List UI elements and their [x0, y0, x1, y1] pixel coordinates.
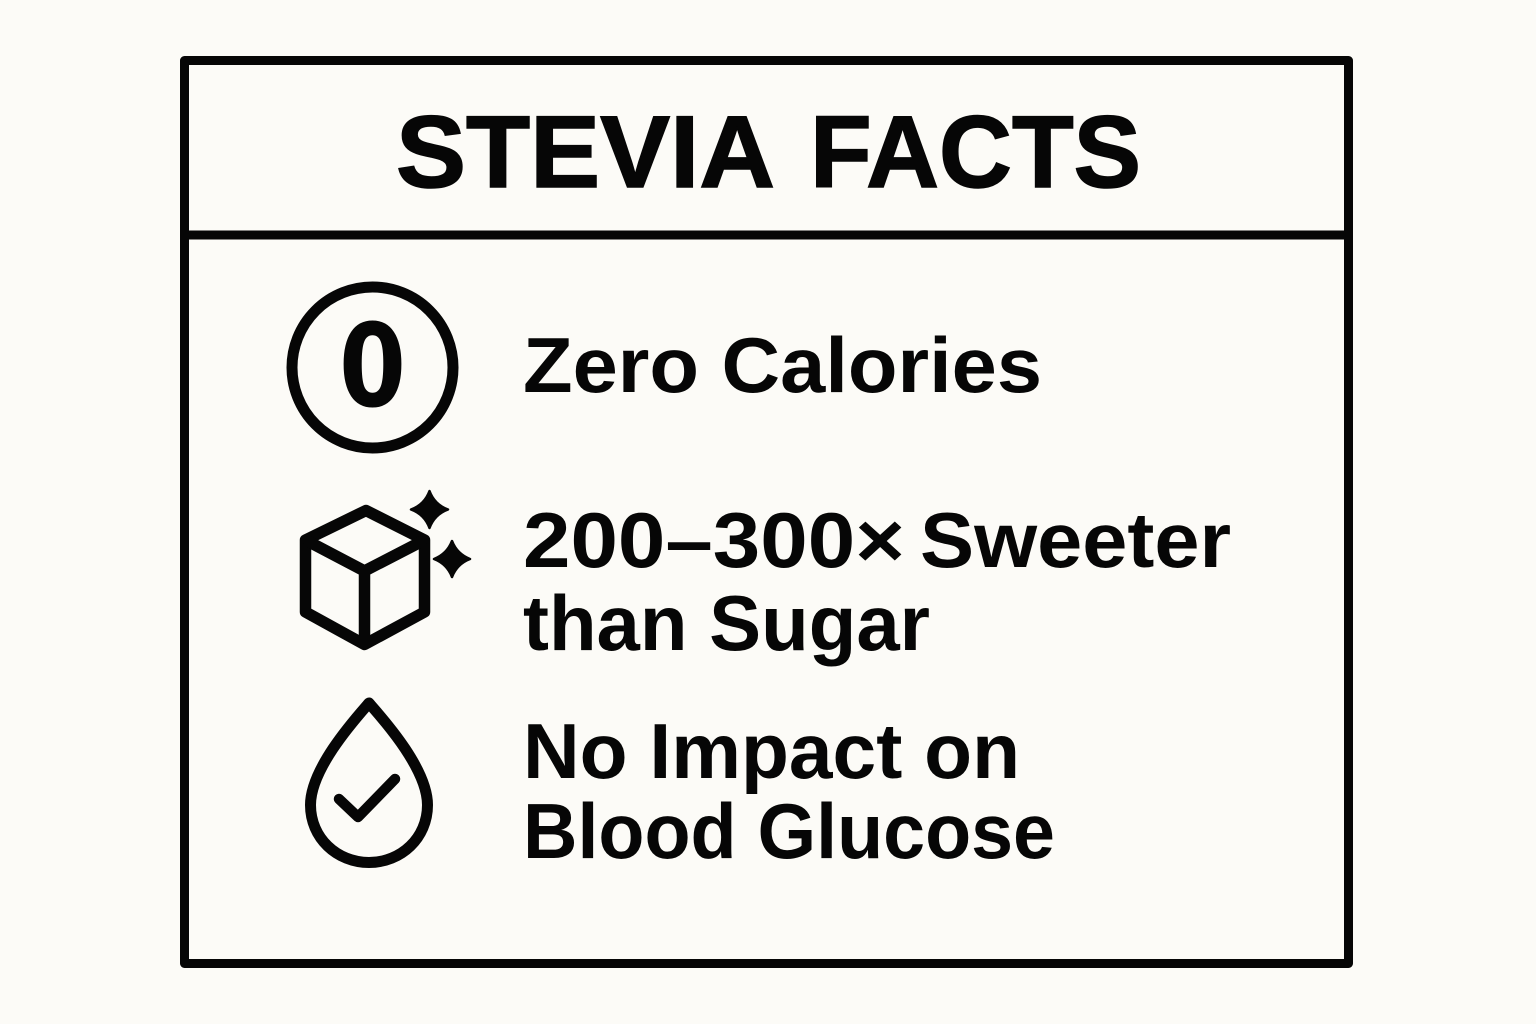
icon: zero in circle: 0: [339, 300, 406, 434]
text: sweeter than sugar: [523, 496, 1231, 667]
title: [396, 95, 1141, 209]
text: no impact on blood glucose: No Impact on: [523, 707, 1020, 795]
text: sweeter than sugar: than Sugar: [523, 579, 930, 667]
title: FACTS: [810, 95, 1141, 209]
icon: zero in circle: [292, 287, 453, 448]
title: STEVIA: [396, 95, 775, 209]
text: zero calories: Zero Calories: [523, 321, 1042, 409]
text: no impact on blood glucose: Blood Glucose: [523, 787, 1055, 875]
icon: sugar cube with sparkles: [306, 491, 470, 644]
icon: drop with check mark: [310, 703, 428, 862]
panel: stevia facts frame: [184, 60, 1348, 964]
text: sweeter than sugar: Sweeter: [920, 496, 1231, 584]
text: sweeter than sugar: 200–300×: [523, 496, 905, 584]
text: no impact on blood glucose: [523, 707, 1055, 875]
